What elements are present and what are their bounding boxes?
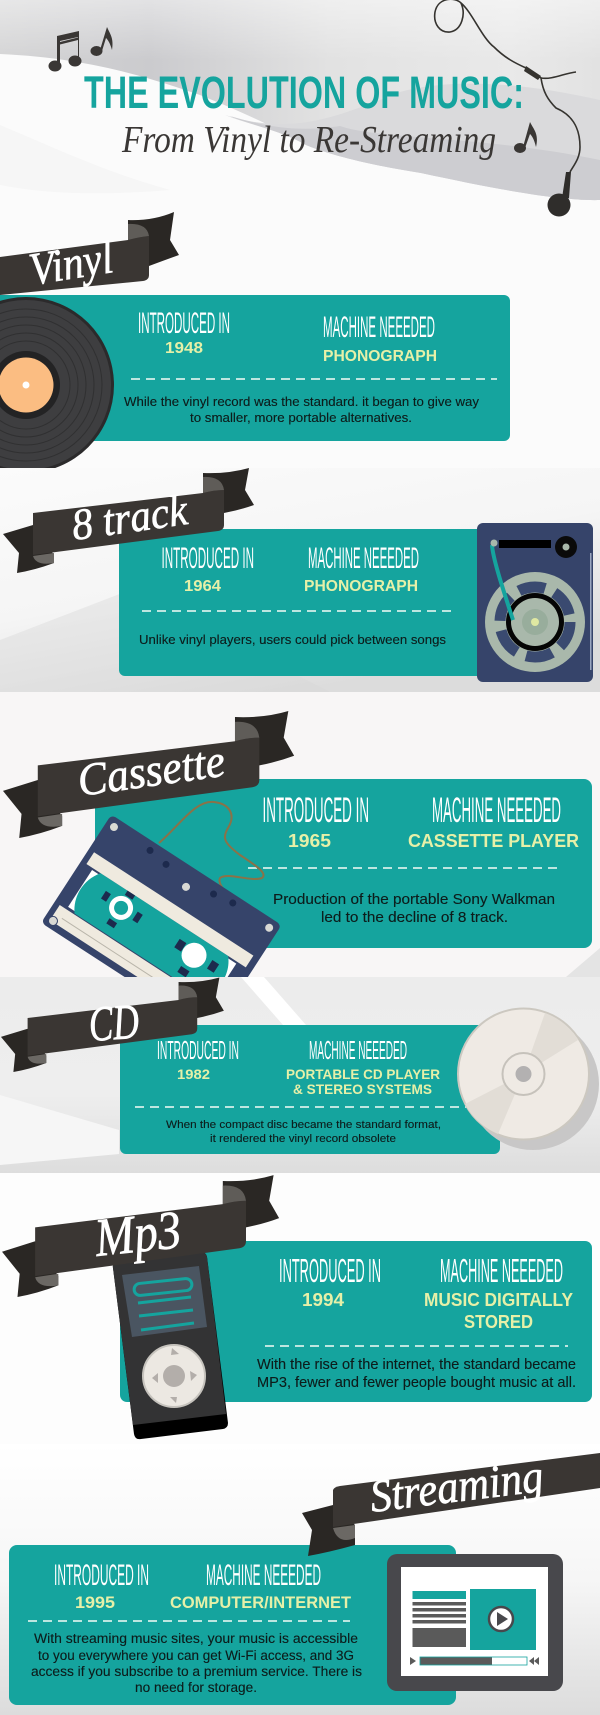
description: While the vinyl record was the standard. it began to give way <box>124 395 480 409</box>
panel: cassette <box>95 779 592 948</box>
description: led to the decline of 8 track. <box>321 910 508 926</box>
machine value: STORED <box>464 1312 533 1332</box>
panel: 8 track: MACHINE NEEEDED <box>308 542 419 575</box>
description: MP3, fewer and fewer people bought music at all. <box>257 1375 576 1391</box>
description <box>124 395 480 425</box>
machine value: & STEREO SYSTEMS <box>293 1081 432 1097</box>
banner title: mp3: Mp3 <box>91 1199 184 1268</box>
icon: mp3 player <box>113 1252 228 1439</box>
icon: music note near subtitle <box>514 122 537 153</box>
icon: beamed music notes <box>48 31 82 72</box>
banner title: 8 track <box>69 485 192 550</box>
panel: streaming: INTRODUCED IN <box>54 1559 149 1592</box>
banner: streaming <box>302 1450 600 1556</box>
introduced year: 1995 <box>75 1593 115 1612</box>
banner: vinyl <box>0 212 179 295</box>
description: no need for storage. <box>135 1680 257 1695</box>
panel: 8 track: INTRODUCED IN <box>162 542 254 575</box>
machine value: PHONOGRAPH <box>304 578 418 595</box>
description: Production of the portable Sony Walkman <box>273 892 555 908</box>
icon: cassette tape <box>43 800 280 977</box>
panel: 8 track <box>119 529 489 676</box>
icon: 8 track player <box>477 523 593 682</box>
banner: 8 track <box>3 468 254 573</box>
description: to smaller, more portable alternatives. <box>190 411 412 425</box>
description: With the rise of the internet, the standard became <box>257 1357 576 1373</box>
icon: vinyl record <box>0 297 114 473</box>
machine value: PORTABLE CD PLAYER <box>286 1066 440 1082</box>
banner title: cd: CD <box>87 993 141 1052</box>
description: to you everywhere you can get Wi-Fi access, and 3G <box>38 1648 354 1663</box>
panel: cd <box>120 1025 500 1154</box>
icon: single music note <box>90 27 113 56</box>
panel: cd: INTRODUCED IN <box>157 1035 239 1065</box>
panel: streaming <box>9 1545 456 1705</box>
icon: compact disc <box>458 1008 599 1150</box>
panel: cd: MACHINE NEEEDED <box>309 1035 407 1065</box>
description: access if you subscribe to a premium service. There is <box>31 1664 362 1679</box>
panel: streaming: MACHINE NEEEDED <box>206 1559 321 1592</box>
machine value <box>424 1290 573 1332</box>
banner: cassette <box>3 711 294 838</box>
panel: cassette: INTRODUCED IN <box>262 791 369 830</box>
panel: vinyl <box>0 295 510 441</box>
machine value: PHONOGRAPH <box>323 348 437 365</box>
panel: vinyl: INTRODUCED IN <box>138 307 230 340</box>
introduced year: 1965 <box>288 831 331 851</box>
banner title: Vinyl <box>26 231 117 295</box>
banner: mp3 <box>2 1175 279 1297</box>
machine value: MUSIC DIGITALLY <box>424 1290 573 1310</box>
description: With streaming music sites, your music is accessible <box>34 1631 358 1646</box>
description <box>257 1357 576 1391</box>
banner title: Streaming <box>367 1450 546 1522</box>
machine value: CASSETTE PLAYER <box>408 831 579 851</box>
icon: tablet <box>387 1554 563 1691</box>
banner title: cassette: Cassette <box>74 735 228 806</box>
introduced year: 1994 <box>302 1290 344 1310</box>
description: When the compact disc became the standard format, <box>166 1119 441 1131</box>
introduced year: 1982 <box>177 1066 210 1082</box>
panel: mp3 <box>120 1241 592 1402</box>
banner: cd <box>1 978 224 1072</box>
subtitle: From Vinyl to Re-Streaming <box>121 119 496 161</box>
description: it rendered the vinyl record obsolete <box>210 1133 396 1145</box>
introduced year: 1964 <box>184 578 221 595</box>
panel: mp3: INTRODUCED IN <box>279 1252 381 1289</box>
icon: earphones <box>435 0 580 217</box>
description <box>273 892 555 926</box>
description: Unlike vinyl players, users could pick between songs <box>139 633 446 647</box>
description <box>31 1631 362 1695</box>
description <box>166 1119 441 1145</box>
machine value: COMPUTER/INTERNET <box>170 1593 352 1612</box>
machine value <box>286 1066 440 1097</box>
introduced year: 1948 <box>165 340 203 357</box>
